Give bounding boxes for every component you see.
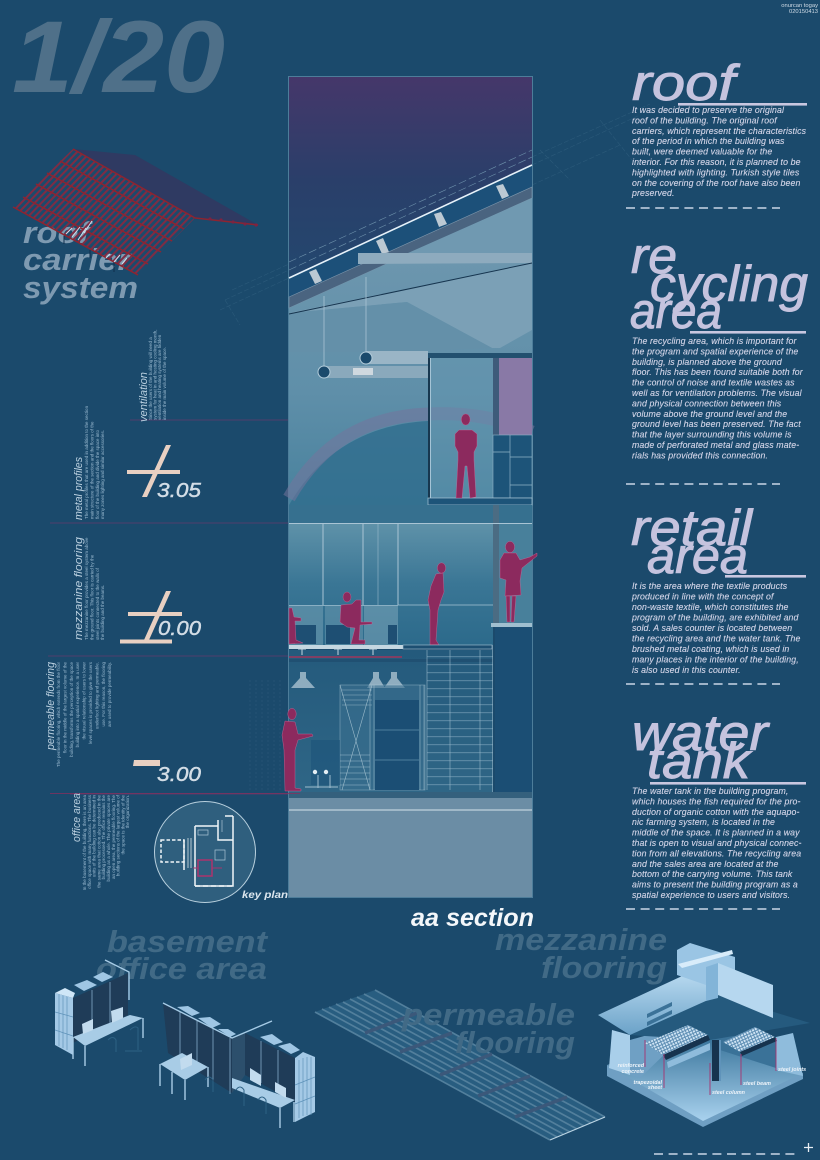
note: permeable flooring: floor in the middle of the largest volume of the	[62, 662, 67, 753]
section: retail floor	[289, 505, 532, 792]
note: permeable flooring	[45, 661, 112, 767]
text: recycling description: the control of noise and textile wastes as	[632, 378, 795, 388]
note: permeable flooring: are used to provide permeability.	[107, 662, 112, 727]
text: roof description: built, were deemed valuable for the	[632, 147, 772, 157]
section: foundation	[50, 792, 532, 897]
note: ventilation	[138, 329, 167, 422]
text: roof description: highlighted with lighting. Turkish style tiles	[632, 167, 800, 177]
level marker: ±0.00	[120, 591, 201, 644]
text: water tank description: that is open to visual and physical connec-	[632, 838, 802, 848]
note: mezzanine flooring: the building and the beams.	[100, 585, 105, 640]
underline	[678, 103, 807, 106]
text: water tank description: spatial experience to users and visitors.	[632, 890, 790, 900]
text: recycling description: made of perforated metal and glass mate-	[632, 440, 799, 450]
note: permeable flooring: use. For this reason, the flooring	[101, 662, 106, 727]
note: metal profiles: many zones lighting and similar accessories.	[100, 430, 105, 519]
note: mezzanine flooring: mezzanine flooring	[73, 536, 85, 640]
faint roof continuation linework	[220, 104, 650, 790]
heading: mezzanine flooring: flooring	[541, 950, 667, 985]
heading: recycling area: re	[631, 228, 677, 284]
section: masonry arch	[289, 421, 428, 505]
heading: permeable flooring	[401, 997, 575, 1060]
text: retail description: non-waste textile, which constitutes the	[632, 602, 789, 612]
section: sky above roof	[289, 77, 532, 307]
heading: basement office area: office area	[96, 951, 267, 986]
heading: recycling area	[630, 228, 808, 339]
underline	[725, 575, 806, 578]
note: office area: building as a whole. The private spaces are	[106, 795, 111, 881]
note: ventilation: Since the users of the building will need a	[148, 337, 153, 420]
text: roof description: roof of the building. The original roof	[632, 115, 778, 125]
heading: roof carrier system: system	[23, 270, 138, 305]
section: floor slab and beams	[289, 645, 492, 649]
heading: recycling area: cycling	[650, 256, 808, 312]
callout labels: steel joints	[778, 1067, 806, 1073]
callout labels: steel column	[712, 1090, 746, 1096]
panel: recycling area	[626, 228, 808, 484]
heading: recycling area: area	[630, 283, 722, 339]
note: office area: office space with many functions. The business	[87, 794, 92, 889]
text: retail description: the recycling area and the water tank. The	[632, 634, 800, 644]
note: mezzanine flooring	[73, 536, 105, 640]
credit: author: onurcan togay	[781, 3, 818, 9]
note: metal profiles: The metal profiles that are used in addition to the section	[84, 405, 89, 519]
note: permeable flooring: building into a spatial experience. In a user	[75, 662, 80, 747]
text: recycling description: volume above the ground level and the	[632, 409, 787, 419]
text: retail description: many places in the interior of the building,	[632, 654, 799, 664]
heading: basement office area	[96, 924, 269, 986]
heading: retail area: retail	[631, 500, 754, 556]
heading: roof carrier system: carrier	[23, 242, 133, 277]
heading: mezzanine flooring: mezzanine	[495, 922, 667, 957]
text: recycling description: ground level has been preserved. The fact	[632, 419, 801, 429]
text: water tank description: middle of the space. It is planned in a way	[632, 828, 800, 838]
note: mezzanine flooring: the ground floor. This floor is carried by the	[89, 554, 94, 640]
section drawing	[50, 76, 537, 898]
panel: roof	[626, 55, 807, 208]
underline	[650, 782, 806, 785]
section: recycling area room	[289, 198, 532, 523]
note: office area: the same area that cotton also produced in the	[96, 795, 101, 888]
text: retail description: brushed metal coating, which is used in	[632, 644, 789, 654]
note: office area: an open area, the permeable flooring. The	[111, 795, 116, 879]
text: retail description: It is the area where the textile products	[632, 581, 788, 591]
text: recycling description: and physical connection between this	[632, 398, 782, 408]
office furniture axonometric: left	[55, 960, 143, 1066]
text: retail description: program of the building, are exhibited and	[631, 612, 800, 622]
note: permeable flooring: underfoot lighting and permeable.	[94, 662, 99, 729]
note: permeable flooring: building, transforms the perception of the space	[69, 662, 74, 757]
panel: retail area	[626, 500, 806, 684]
section: frame	[288, 76, 532, 898]
mezzanine flooring axonometric	[598, 943, 810, 1127]
level marker: ±0.00: 0.00	[158, 618, 201, 640]
level guide lines	[48, 420, 289, 794]
note: ventilation: ventilation and heating systems are hidden	[157, 334, 162, 420]
plus mark	[804, 1143, 813, 1152]
note: permeable flooring: The permeable flooring, which extends from the floor	[56, 662, 61, 767]
text: water tank description: duction of organic cotton with the aquapo-	[632, 807, 800, 817]
heading: retail area	[631, 500, 754, 584]
trapezoidal gratings and steel beams	[645, 1025, 708, 1055]
heading: permeable flooring: permeable	[401, 997, 575, 1032]
note: ventilation: inside the main volume of the space.	[162, 347, 167, 420]
level marker: +3.05	[127, 445, 202, 502]
note: metal profiles: metal profiles	[73, 457, 85, 520]
text: water tank description: which houses the fish required for the pro-	[632, 796, 801, 806]
text: retail description: produced in line with the concept of	[631, 592, 775, 602]
steel column	[712, 1040, 719, 1081]
text: roof description: It was decided to preserve the original	[632, 105, 785, 115]
level marker: -3.00	[133, 760, 201, 786]
upper slab	[630, 995, 810, 1040]
level marker: +3.05: 3.05	[157, 480, 202, 502]
key plan	[154, 802, 288, 902]
section: recycling volume glass box	[428, 353, 532, 505]
person: seated figure at left edge	[289, 608, 303, 644]
note: ventilation: system for heat in and hosting cooling month,	[153, 329, 158, 420]
text: water tank description: bottom of the carrying volume. This tank	[632, 869, 793, 879]
heading: roof carrier system	[23, 215, 138, 305]
permeable flooring axonometric	[315, 990, 605, 1140]
heading: roof: roof	[632, 55, 741, 111]
text: retail description: sold. A sales counter is located between	[632, 623, 792, 633]
callout labels: steel beam	[743, 1081, 771, 1087]
text: recycling description: rials has provided this connection.	[632, 450, 768, 460]
callout labels: reinforced	[618, 1063, 645, 1069]
footer dashes	[654, 1153, 798, 1155]
key plan label: key plan	[242, 890, 288, 901]
credit: author: 020150413	[789, 9, 818, 15]
underline	[690, 331, 806, 334]
heading: water tank	[632, 705, 771, 789]
note: office area: the organization.	[125, 795, 130, 828]
note: permeable flooring: permeable flooring	[45, 661, 57, 751]
note: metal profiles: floor of the building and divide the space into	[95, 429, 100, 519]
text: water tank description: aims to present the building program as a	[632, 880, 798, 890]
scale title 1/20: 1/20	[12, 0, 225, 114]
note: office area: units of the building can be determined in	[92, 795, 97, 877]
text: recycling description: well as for ventilation problems. The visual	[632, 388, 803, 398]
text: roof description: interior. For this reason, it is planned to be	[632, 157, 801, 167]
text: water tank description: and the sales area are located at the	[632, 859, 778, 869]
support walls	[609, 1030, 630, 1075]
text: recycling description: The recycling area, which is important for	[632, 336, 798, 346]
section title: aa section	[411, 904, 534, 932]
text: water tank description: The water tank in the building program,	[632, 786, 788, 796]
text: retail description: is also used in this counter.	[632, 665, 741, 675]
note: ventilation: ventilation	[138, 372, 150, 422]
text: recycling description: that the layer surrounding this volume is	[632, 430, 792, 440]
note: metal profiles	[73, 405, 105, 520]
text: roof description: of the period in which the building was	[632, 136, 785, 146]
note: permeable flooring: the visual relationship of users to lower	[82, 662, 87, 740]
roof carrier axonometric	[13, 149, 258, 275]
text: recycling description: the program and spatial experience of the	[632, 346, 798, 356]
note: office area: office area	[71, 793, 83, 842]
person: woman looking down	[428, 563, 446, 645]
person: seated woman	[340, 592, 372, 644]
note: mezzanine flooring: steel joints connected to the walls of	[95, 567, 100, 640]
callout labels	[618, 1063, 806, 1096]
section: ventilation ducts	[318, 351, 428, 378]
heading: permeable flooring: flooring	[455, 1025, 575, 1060]
callout labels: trapezoidal	[634, 1080, 662, 1086]
callout labels: sheet	[648, 1085, 662, 1091]
office furniture axonometric: right	[160, 1003, 315, 1128]
text: roof description: carriers, which represent the characteristics	[632, 126, 807, 136]
text: recycling description: floor. This has been found suitable both for	[632, 367, 804, 377]
note: office area: building sections of the largest volume of	[116, 794, 121, 876]
lower slab	[607, 1065, 803, 1127]
text: water tank description: nic farming system, is located in the	[632, 817, 775, 827]
callout labels: concrete	[622, 1069, 644, 1075]
credit: author	[781, 3, 818, 15]
heading: retail area: area	[647, 528, 748, 584]
heading: basement office area: basement	[107, 924, 269, 959]
note: permeable flooring: level spaces is provided to give the users	[88, 661, 93, 744]
text: roof description: preserved.	[631, 188, 675, 198]
section: roof layers	[289, 150, 532, 308]
note: office area: the space is the identity of the	[120, 795, 125, 855]
callout leaders	[645, 1038, 776, 1095]
text: roof description: on the covering of the roof have also been	[632, 178, 801, 188]
person: office man	[282, 708, 313, 791]
heading: mezzanine flooring	[495, 922, 667, 985]
note: mezzanine flooring: The mezzanine floor provides a steel system above	[84, 537, 89, 640]
note: office area: building processed. The office remains the	[101, 795, 106, 879]
note: office area	[71, 793, 130, 890]
person: woman presenting	[500, 541, 537, 622]
panel: water tank	[626, 705, 806, 909]
heading: roof carrier system: roof	[23, 215, 93, 250]
level marker: -3.00: 3.00	[157, 764, 201, 786]
upper walls	[598, 943, 773, 1035]
heading: water tank: water	[632, 705, 771, 761]
section: basement office	[289, 645, 493, 792]
person: standing man recycling	[455, 414, 477, 498]
text: recycling description: building, is planned above the ground	[632, 357, 783, 367]
note: office area: In the basement of the building, there is an area	[82, 795, 87, 890]
office chairs and desk	[305, 740, 340, 788]
heading: water tank: tank	[647, 733, 753, 789]
text: water tank description: tion from all elevations. The recycling area	[632, 848, 801, 858]
note: metal profiles: main structure of the section and the floors of the	[89, 421, 94, 519]
